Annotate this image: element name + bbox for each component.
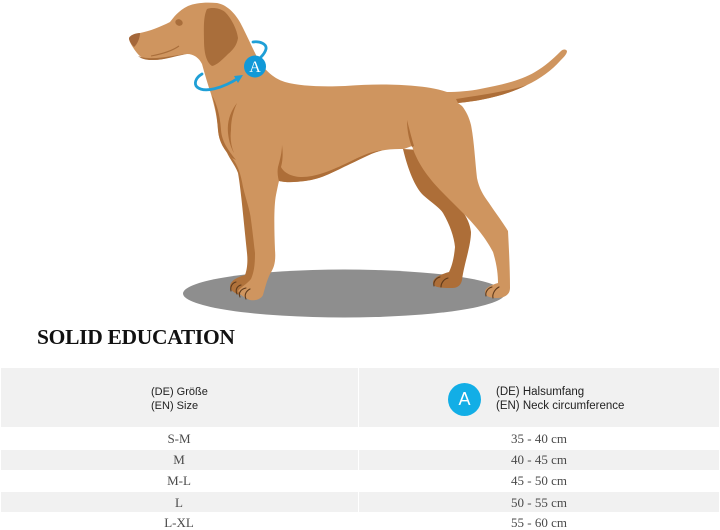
neck header <box>496 386 624 412</box>
row stripes <box>1 450 719 470</box>
table <box>1 368 719 530</box>
neck values column: 45 - 50 cm <box>511 473 567 488</box>
neck values column: 35 - 40 cm <box>511 431 567 446</box>
mouth and under-jaw shading <box>138 54 187 60</box>
sizes column: M <box>173 452 185 467</box>
dog body <box>129 3 567 300</box>
neck arrow <box>195 42 266 90</box>
body shading <box>212 85 527 182</box>
sizes column <box>164 431 194 530</box>
sizes column: M-L <box>167 473 191 488</box>
size header <box>151 386 208 412</box>
nose <box>129 33 140 47</box>
neck header: (DE) Halsumfang <box>496 386 584 398</box>
neck header: (EN) Neck circumference <box>496 400 624 412</box>
badge A: A <box>249 59 261 76</box>
far front leg <box>225 146 258 295</box>
column divider <box>358 368 359 512</box>
far hind leg <box>403 149 471 288</box>
icon: A badge: A <box>458 389 470 409</box>
neck values column <box>511 431 567 530</box>
size header: (EN) Size <box>151 400 198 412</box>
table header background <box>1 368 719 427</box>
arrow head <box>234 75 243 83</box>
sizes column: L-XL <box>164 515 194 530</box>
toes <box>231 277 499 299</box>
sizes column: L <box>175 495 183 510</box>
ear <box>204 8 238 66</box>
neck values column: 40 - 45 cm <box>511 452 567 467</box>
neck values column: 55 - 60 cm <box>511 515 567 530</box>
eye <box>174 18 184 27</box>
ground shadow <box>183 270 505 318</box>
dog illustration with neck measurement <box>129 2 567 318</box>
sizes column: S-M <box>167 431 191 446</box>
size header: (DE) Größe <box>151 386 208 398</box>
icon: A badge <box>448 383 481 416</box>
neck values column: 50 - 55 cm <box>511 495 567 510</box>
badge A <box>244 56 266 78</box>
title: SOLID EDUCATION <box>37 325 235 349</box>
